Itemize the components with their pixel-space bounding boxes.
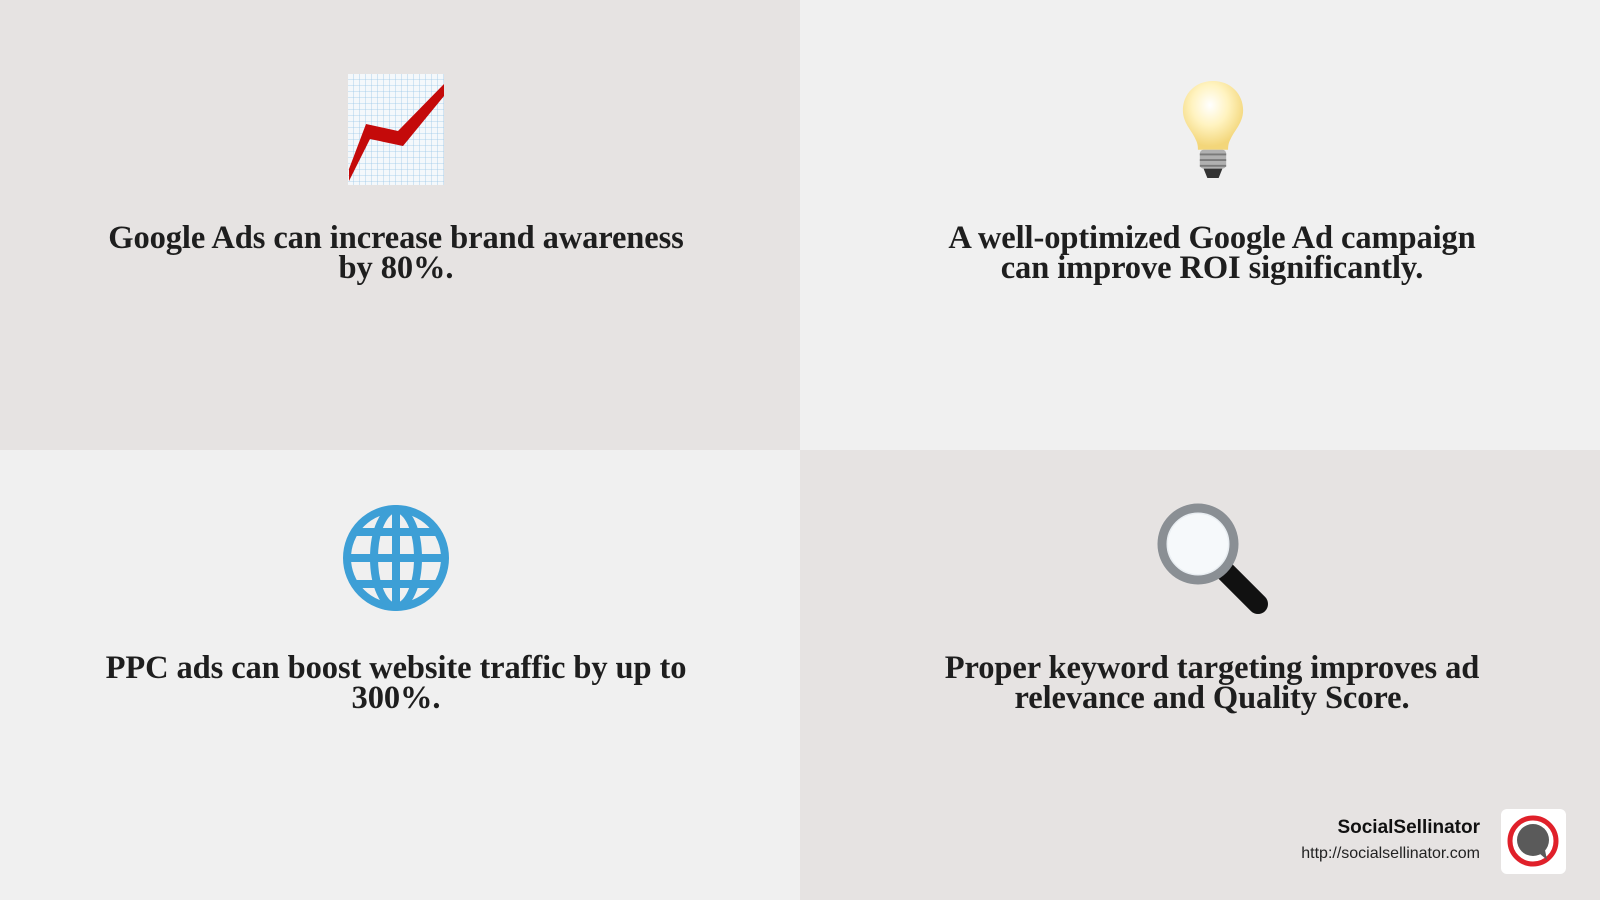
panel: keyword [800,450,1600,900]
heading: Proper keyword targeting improves ad [945,650,1479,686]
brand name: SocialSellinator [1337,817,1480,838]
heading [945,650,1479,716]
brand block [1301,809,1566,874]
heading: 300%. [352,680,440,716]
brand url: http://socialsellinator.com [1301,845,1480,862]
panel: traffic [0,450,800,900]
heading: A well-optimized Google Ad campaign [948,220,1476,256]
panel: brand awareness [0,0,800,450]
heading [108,220,684,286]
heading [106,650,686,716]
icon: light bulb [1182,81,1244,178]
icon: globe [343,505,449,611]
icon: magnifier [1158,504,1268,614]
heading: Google Ads can increase brand awareness [108,220,684,256]
heading: by 80%. [339,250,453,286]
logo [1501,809,1566,874]
heading: can improve ROI significantly. [1001,250,1423,286]
heading: PPC ads can boost website traffic by up to [106,650,686,686]
panel: ROI [800,0,1600,450]
heading [948,220,1476,286]
icon: chart [348,74,444,185]
heading: relevance and Quality Score. [1014,680,1410,716]
